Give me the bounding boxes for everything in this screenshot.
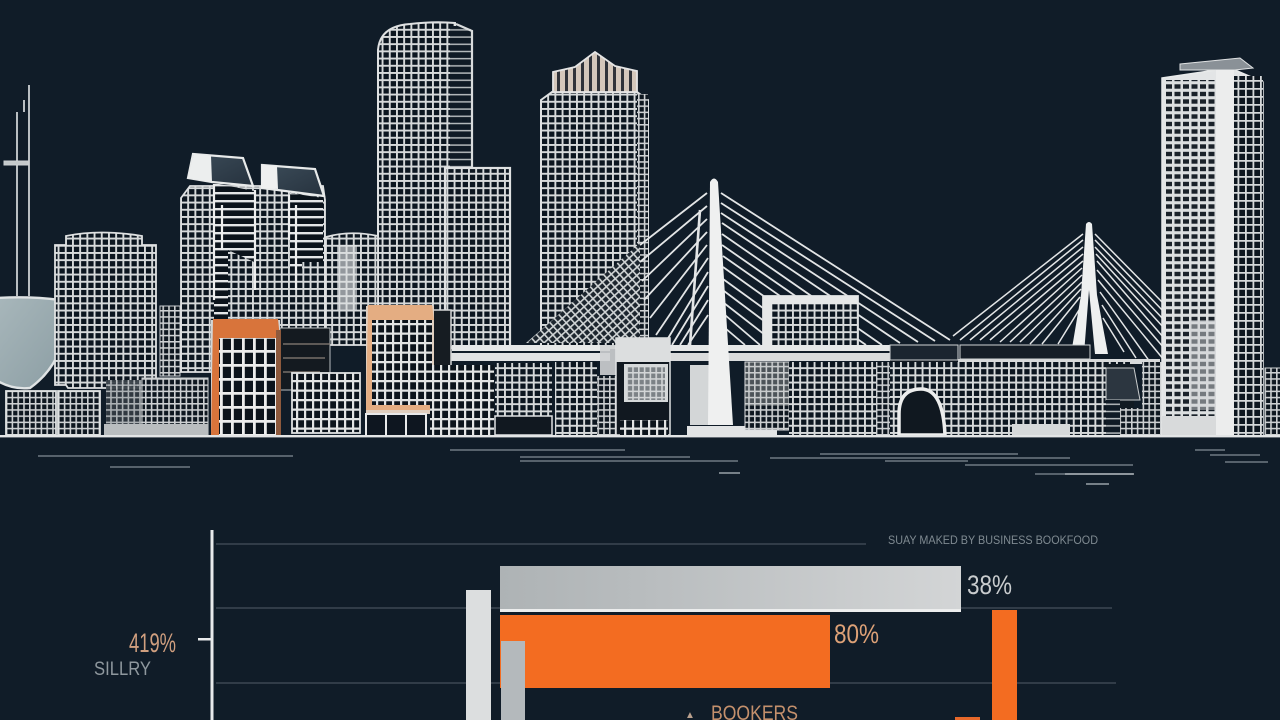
buildings right of tower	[745, 362, 892, 435]
ground line	[0, 435, 1280, 437]
narrow tower right of twins	[326, 233, 378, 345]
grey vertical bar	[466, 590, 491, 720]
value 41%: 419%	[129, 628, 176, 658]
block tower beside cylinder	[445, 168, 510, 348]
small grey vertical bar	[501, 641, 525, 720]
water reflections	[38, 450, 1268, 484]
bridge tower base	[687, 426, 777, 436]
gridlines	[216, 544, 1116, 683]
tower cap	[1180, 58, 1253, 70]
category label salary: SILLRY	[94, 659, 151, 680]
value 80%: 80%	[834, 619, 879, 649]
second bridge tower	[1071, 222, 1108, 354]
main bridge tower	[708, 178, 733, 425]
left observation tower	[4, 85, 29, 296]
long low-rise block	[958, 345, 1130, 435]
value 38%: 38%	[967, 570, 1012, 600]
shield-shaped tower base	[0, 297, 65, 388]
dark block with bright panel	[616, 338, 670, 435]
twin towers	[181, 154, 325, 380]
twin roof right	[262, 165, 324, 196]
stripes	[214, 183, 254, 320]
axis tick	[198, 638, 211, 640]
dark block before right tower	[1106, 362, 1164, 436]
chart header: SUAY MAKED BY BUSINESS BOOKFOOD	[888, 533, 1098, 547]
left mid-rise building	[55, 232, 156, 388]
dense mesh of cables across cylinder	[526, 243, 640, 343]
small block	[160, 306, 180, 376]
block behind bridge tower	[690, 365, 710, 425]
low buildings left	[6, 378, 208, 435]
tan-framed building	[366, 305, 451, 436]
arched gatehouse	[890, 345, 958, 435]
building above bridge deck	[763, 296, 858, 346]
second bridge cables	[953, 234, 1164, 362]
low building row under deck	[430, 345, 617, 435]
cylindrical skyscraper with crown	[541, 52, 648, 348]
low building beside orange block	[292, 373, 360, 433]
y axis	[210, 530, 214, 720]
crown	[553, 52, 637, 92]
orange horizontal bar	[500, 615, 830, 688]
bridge deck	[450, 345, 1160, 364]
bar chart	[94, 530, 1116, 720]
white column	[1216, 70, 1234, 435]
cylindrical skyscraper left	[378, 22, 472, 312]
bridge cables main span	[640, 193, 950, 345]
orange-framed building left	[211, 319, 330, 436]
right tower	[1162, 58, 1263, 435]
small orange bar	[955, 717, 980, 720]
grey horizontal bar	[500, 566, 961, 612]
twin roof left	[188, 154, 253, 186]
orange vertical bar	[992, 610, 1017, 720]
far-right building	[1265, 368, 1280, 435]
